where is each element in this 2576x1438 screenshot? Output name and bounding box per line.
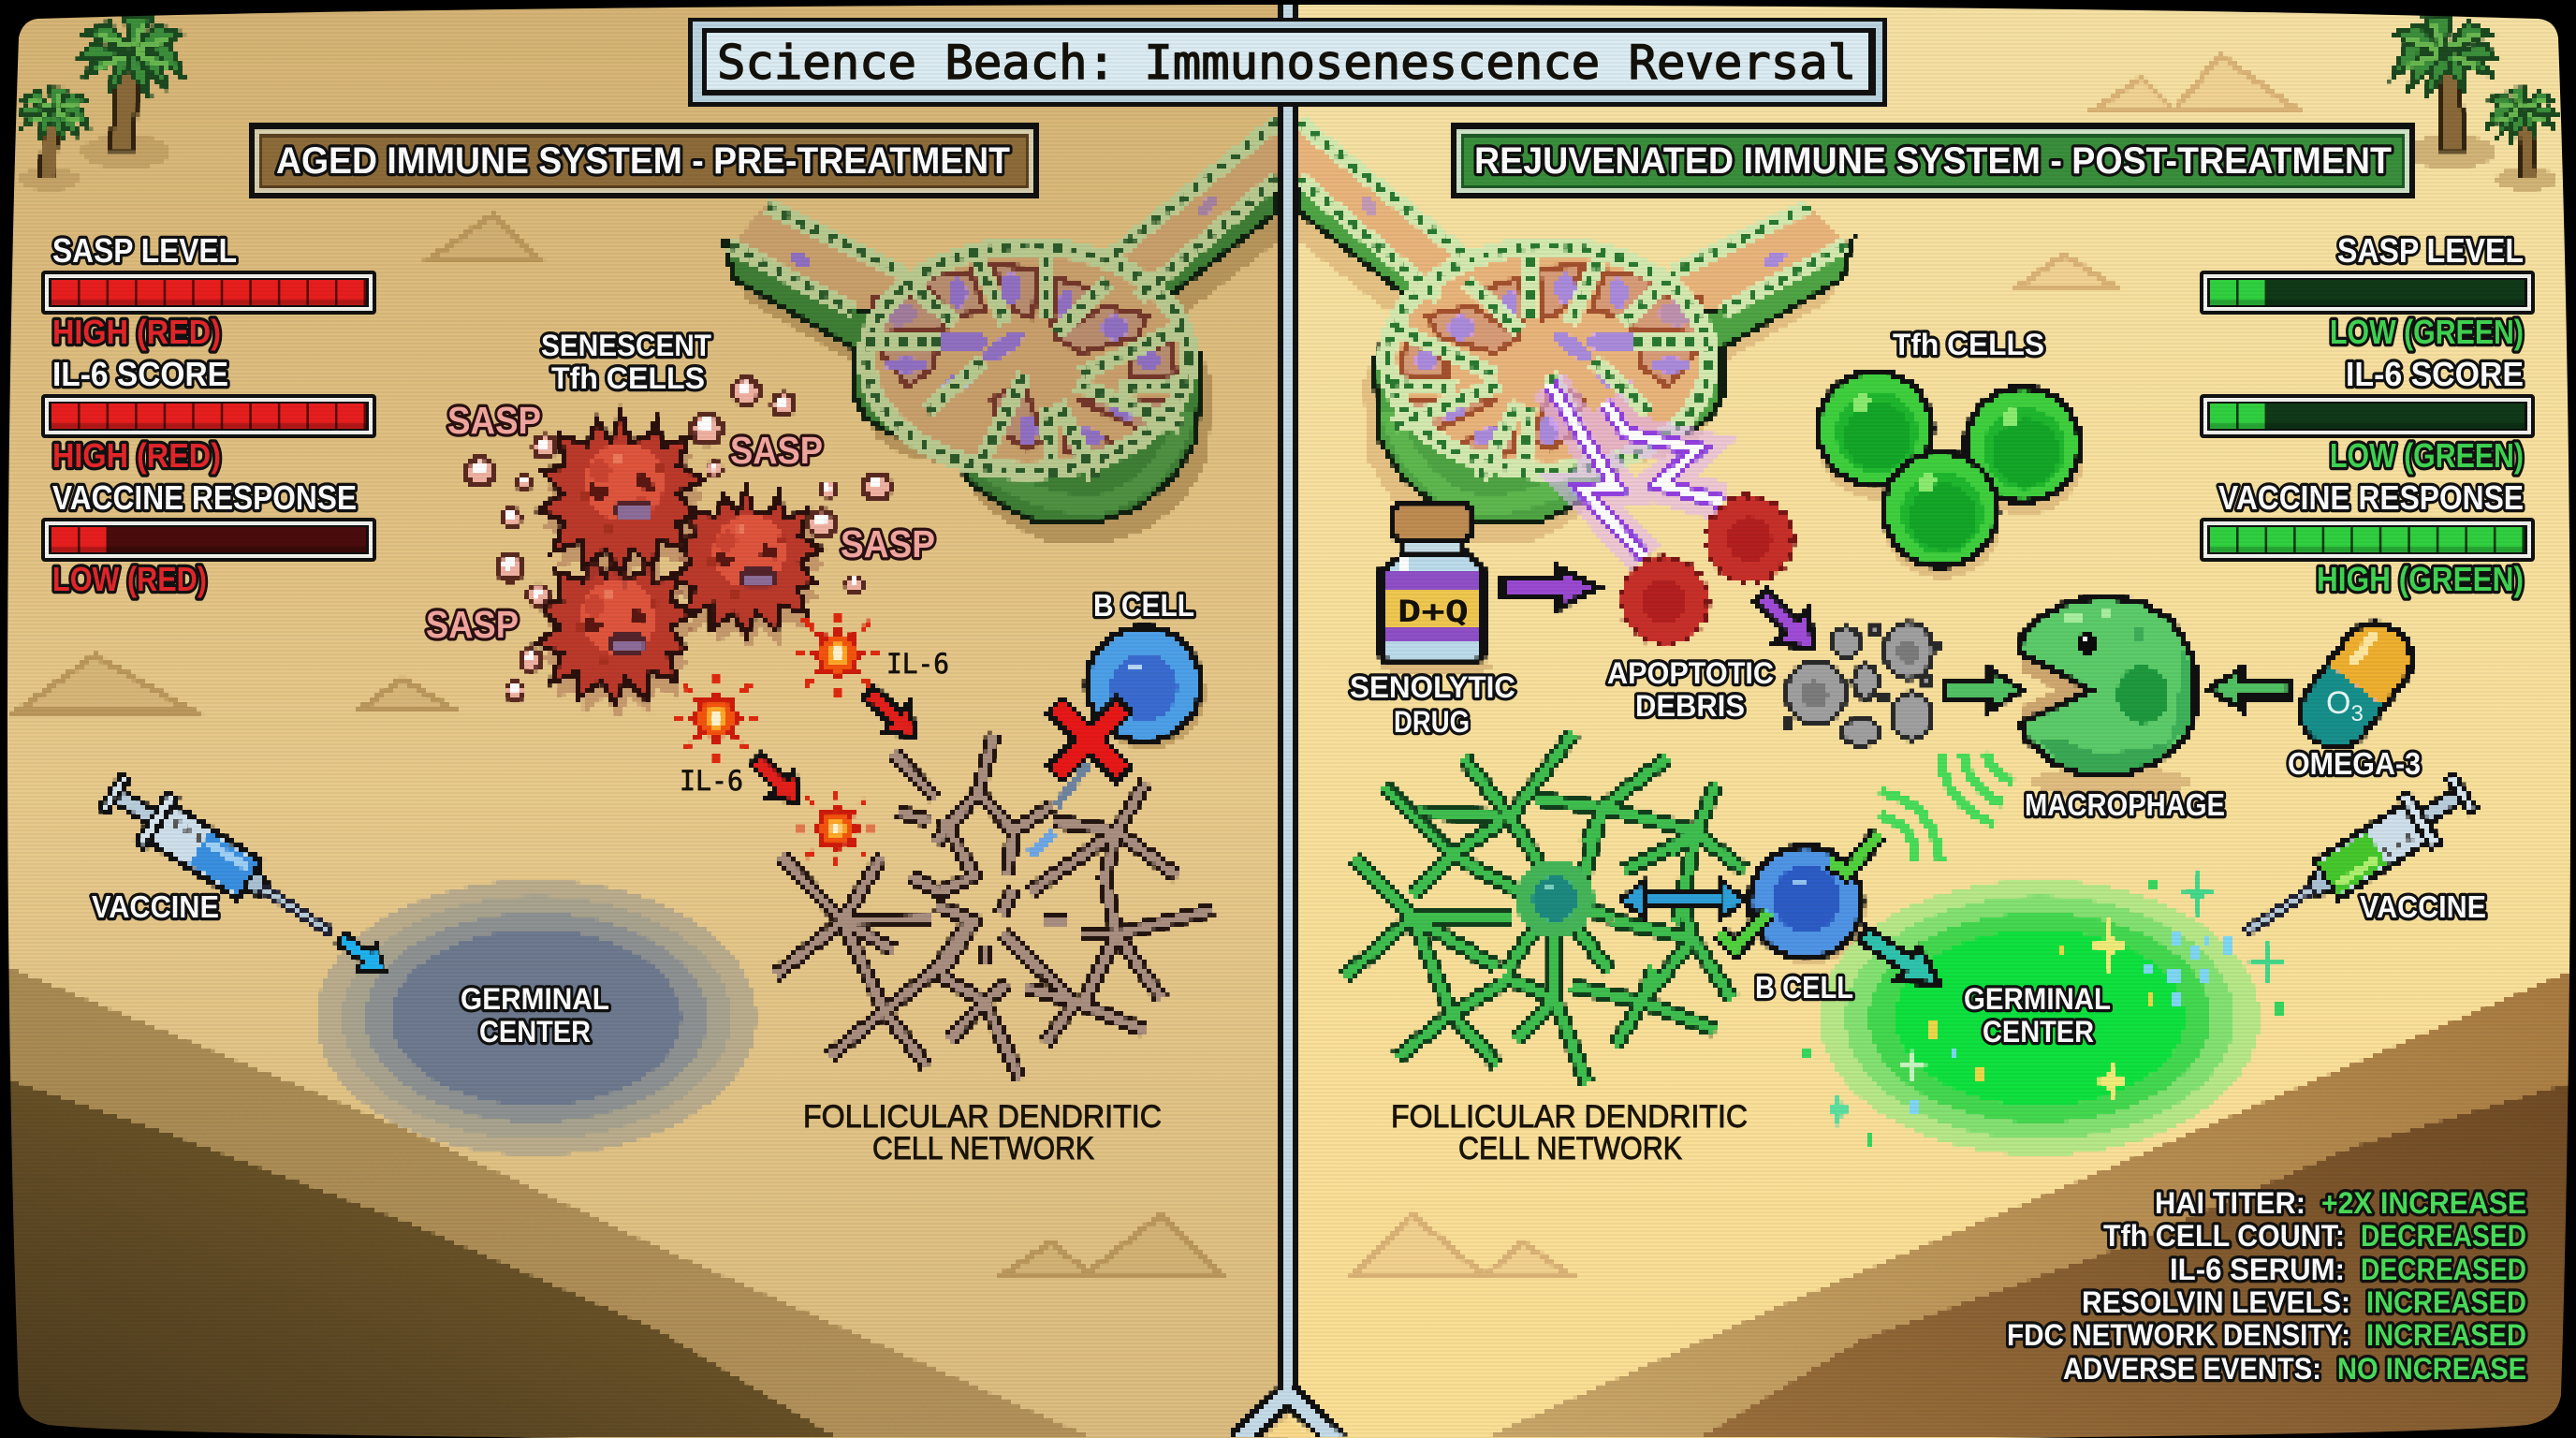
- checkmarks: [1719, 833, 1880, 948]
- lymph node: aged: [724, 122, 1289, 543]
- label: apoptotic debris: DEBRIS: [1635, 689, 1745, 723]
- title banner: Science Beach: Immunosenescence Reversal: [717, 36, 1856, 90]
- labels: SASP: SASP: [730, 429, 823, 472]
- label: B cell aged: B CELL: [1093, 588, 1194, 623]
- icon: palm trees right: [2393, 18, 2557, 191]
- outcomes list: FDC NETWORK DENSITY:: [2007, 1318, 2350, 1352]
- labels: SASP: [426, 399, 935, 646]
- IL-6 sparks: [672, 611, 882, 867]
- label: macrophage: MACROPHAGE: [2025, 787, 2225, 822]
- label: vaccine rejuvenated: VACCINE: [2360, 889, 2486, 924]
- label: omega-3: OMEGA-3: [2288, 746, 2421, 781]
- syringe: vaccine rejuvenated: [2231, 766, 2481, 957]
- debris rocks: [1786, 623, 1939, 745]
- stat: SASP level aged: HIGH (RED): [52, 313, 221, 351]
- syringe: vaccine aged: [95, 766, 345, 957]
- stat: SASP level rejuvenated: LOW (GREEN): [2330, 313, 2524, 351]
- B cell: rejuvenated: [1749, 846, 1866, 964]
- outcomes list: DECREASED: [2361, 1219, 2526, 1253]
- stat: IL-6 score rejuvenated: LOW (GREEN): [2330, 436, 2524, 475]
- germinal center: rejuvenated: [1820, 880, 2260, 1155]
- label: O3 on capsule: O: [2326, 685, 2350, 721]
- stat: vaccine response rejuvenated: HIGH (GREEN): [2317, 560, 2524, 598]
- Tfh cells: healthy trio: [1818, 372, 2083, 579]
- lightning bolts: [1549, 384, 1723, 558]
- double arrow: network to B cell: [1620, 882, 1746, 917]
- outcomes list: INCREASED: [2366, 1285, 2526, 1319]
- stat: IL-6 score rejuvenated: [2200, 355, 2535, 475]
- icon: palm trees left: [19, 18, 183, 191]
- stat: SASP level rejuvenated: [2200, 231, 2535, 351]
- label: germinal center aged: [461, 982, 609, 1049]
- stat: vaccine response rejuvenated: [2200, 478, 2535, 598]
- label: follicular dendritic network rejuvenated: [1391, 1099, 1748, 1167]
- label: D+Q on vial: D+Q: [1398, 594, 1469, 629]
- heading: rejuvenated immune system: [1451, 123, 2415, 198]
- label: apoptotic debris: APOPTOTIC: [1607, 656, 1774, 690]
- label: senolytic drug: [1350, 670, 1515, 739]
- label: apoptotic debris: [1607, 656, 1774, 723]
- labels: IL-6: IL-6: [886, 648, 949, 680]
- heading: rejuvenated immune system: REJUVENATED IMMUNE SYSTEM - POST-TREATMENT: [1474, 140, 2392, 182]
- senescent Tfh cells cluster: [536, 414, 826, 719]
- center divider: [1237, 0, 1339, 1438]
- arrow: debris to macrophage: [1945, 669, 2022, 711]
- arrow: drug to cells: [1503, 567, 1598, 609]
- label: germinal center rejuvenated: CENTER: [1983, 1015, 2094, 1049]
- stat: SASP level aged: [41, 231, 376, 351]
- label: germinal center rejuvenated: [1964, 982, 2111, 1049]
- heading: aged immune system: [249, 123, 1039, 198]
- title banner: [688, 18, 1887, 107]
- sand hills: left panel: [0, 964, 1092, 1438]
- signal waves: [1880, 752, 2013, 861]
- lymph node: rejuvenated: [1287, 122, 1852, 543]
- red X blocked: [1062, 712, 1117, 767]
- stat: SASP level rejuvenated: SASP LEVEL: [2337, 231, 2524, 270]
- outcomes list: [2007, 1186, 2526, 1386]
- label: germinal center rejuvenated: GERMINAL: [1964, 982, 2111, 1016]
- outcomes list: NO INCREASE: [2337, 1352, 2526, 1386]
- broken link: B cell to network: [1031, 764, 1089, 854]
- outcomes list: IL-6 SERUM:: [2170, 1253, 2345, 1286]
- apoptotic red cells: [1621, 496, 1793, 644]
- outcomes list: DECREASED: [2361, 1253, 2526, 1286]
- germinal center: aged: [316, 880, 756, 1155]
- stat: SASP level aged: SASP LEVEL: [52, 231, 237, 270]
- damaged follicular dendritic network: [775, 734, 1213, 1079]
- label: senolytic drug: DRUG: [1394, 705, 1470, 739]
- outcomes list: ADVERSE EVENTS:: [2063, 1352, 2321, 1386]
- panel: aged sand background: [0, 0, 1288, 1438]
- dunes: right panel: [1354, 55, 2298, 1276]
- outcomes list: RESOLVIN LEVELS:: [2082, 1285, 2350, 1319]
- label: germinal center aged: CENTER: [479, 1015, 591, 1049]
- healthy follicular dendritic network: [1345, 733, 1745, 1083]
- stat: vaccine response aged: LOW (RED): [52, 560, 207, 598]
- sparkles around germinal center: [1802, 871, 2286, 1146]
- B cell: aged: [1087, 627, 1206, 749]
- label: follicular dendritic network aged: FOLLICULAR DENDRITIC: [803, 1099, 1162, 1135]
- labels: SASP: SASP: [426, 603, 519, 646]
- label: senolytic drug: SENOLYTIC: [1350, 670, 1515, 704]
- stat: IL-6 score rejuvenated: IL-6 SCORE: [2346, 355, 2524, 393]
- labels: SASP: SASP: [841, 522, 935, 565]
- icon: omega-3 capsule: [2287, 610, 2425, 760]
- labels: IL-6: IL-6: [680, 765, 743, 797]
- label: follicular dendritic network rejuvenated: FOLLICULAR DENDRITIC: [1391, 1099, 1748, 1135]
- labels: IL-6: [680, 648, 949, 797]
- label: follicular dendritic network aged: [803, 1099, 1162, 1167]
- heading: aged immune system: AGED IMMUNE SYSTEM - PRE-TREATMENT: [276, 140, 1010, 182]
- labels: SASP: SASP: [447, 399, 541, 442]
- stat: IL-6 score aged: IL-6 SCORE: [52, 355, 228, 393]
- arrow: omega-3 to macrophage: [2209, 668, 2290, 710]
- outcomes list: Tfh CELL COUNT:: [2103, 1219, 2345, 1253]
- stat: vaccine response aged: VACCINE RESPONSE: [52, 478, 357, 517]
- outcomes list: INCREASED: [2366, 1318, 2526, 1352]
- icon: D+Q senolytic vial: [1381, 505, 1491, 676]
- label: senescent Tfh cells: [541, 329, 711, 395]
- label: B cell rejuvenated: B CELL: [1755, 970, 1853, 1005]
- label: follicular dendritic network aged: CELL NETWORK: [872, 1131, 1094, 1167]
- label: germinal center aged: GERMINAL: [461, 982, 609, 1016]
- panel: rejuvenated sand background: [1288, 0, 2576, 1438]
- arrow: vaccine to germinal center: [331, 926, 394, 983]
- label: vaccine aged: VACCINE: [92, 889, 219, 924]
- macrophage: [2020, 596, 2195, 797]
- dunes: left panel: [17, 215, 1223, 1276]
- SASP bubbles: [466, 378, 890, 700]
- stat: IL-6 score aged: HIGH (RED): [52, 436, 221, 475]
- outcomes list: HAI TITER:: [2155, 1186, 2305, 1220]
- outcomes list: +2X INCREASE: [2321, 1186, 2526, 1220]
- sand hills: right panel: [1485, 969, 2576, 1438]
- label: follicular dendritic network rejuvenated: CELL NETWORK: [1458, 1131, 1682, 1167]
- stat: IL-6 score aged: [41, 355, 376, 475]
- arrow: cells to debris: [1746, 580, 1830, 665]
- stat: vaccine response rejuvenated: VACCINE RESPONSE: [2218, 478, 2524, 517]
- arrows: IL-6 red: [743, 679, 929, 815]
- label: O3 on capsule: 3: [2350, 701, 2364, 726]
- label: Tfh cells: Tfh CELLS: [1893, 328, 2044, 361]
- stat: vaccine response aged: [41, 478, 376, 598]
- label: senescent Tfh cells: SENESCENT: [541, 329, 711, 362]
- label: senescent Tfh cells: Tfh CELLS: [551, 361, 705, 395]
- arrow: B cell to germinal center: [1852, 917, 1952, 1002]
